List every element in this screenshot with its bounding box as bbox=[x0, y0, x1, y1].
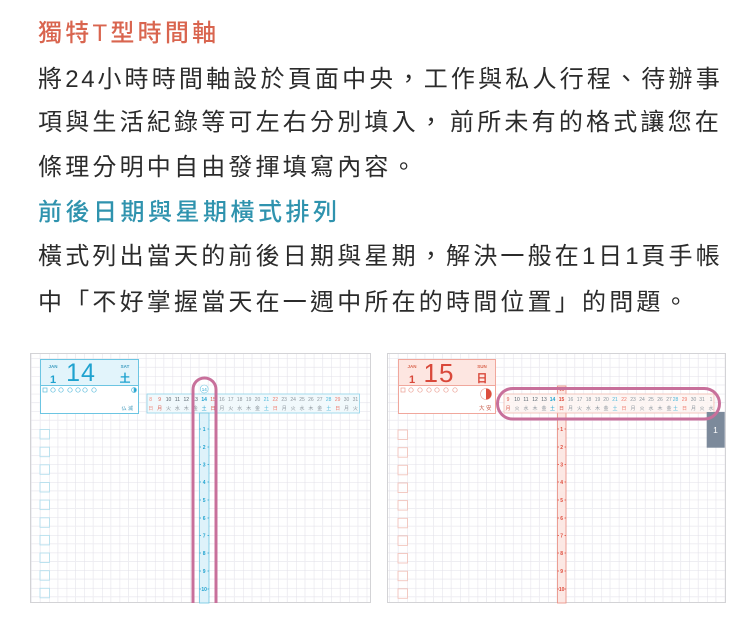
horizontal date strip: 月 bbox=[219, 406, 224, 412]
horizontal date strip: 金 bbox=[255, 405, 260, 412]
grey month tab bbox=[707, 412, 725, 448]
horizontal date strip: 月 bbox=[505, 406, 511, 412]
date header box: JAN bbox=[407, 364, 417, 369]
horizontal date strip: 27 bbox=[666, 397, 672, 403]
horizontal date strip: 日 bbox=[148, 406, 153, 412]
weather icons bbox=[43, 388, 136, 392]
horizontal date strip: 火 bbox=[291, 406, 296, 412]
heading: unique T timeline: 獨特T型時間軸 bbox=[38, 20, 219, 47]
vertical 24-hour timeline: 6 bbox=[560, 516, 563, 522]
horizontal date strip: 日 bbox=[210, 406, 216, 412]
horizontal date strip: 月 bbox=[568, 406, 573, 412]
date header box: JAN bbox=[48, 364, 58, 369]
horizontal date strip: 24 bbox=[290, 397, 296, 403]
horizontal date strip: 29 bbox=[335, 397, 341, 403]
horizontal date strip: 土 bbox=[202, 405, 207, 412]
horizontal date strip: 15 bbox=[559, 397, 564, 403]
pink highlight around vertical timeline bbox=[193, 378, 216, 603]
horizontal date strip: 25 bbox=[648, 397, 654, 403]
horizontal date strip: 木 bbox=[532, 405, 538, 412]
text block: T timeline description bbox=[38, 66, 723, 181]
horizontal date strip: 金 bbox=[666, 405, 672, 412]
vertical 24-hour timeline: 1 bbox=[203, 427, 206, 433]
horizontal date strip: 月 bbox=[691, 406, 696, 412]
vertical 24-hour timeline: 4 bbox=[560, 480, 563, 486]
horizontal date strip: 25 bbox=[299, 397, 305, 403]
horizontal date strip: 18 bbox=[586, 397, 591, 403]
horizontal date strip: 金 bbox=[541, 405, 547, 412]
horizontal date strip: 22 bbox=[273, 397, 278, 403]
horizontal date strip: 火 bbox=[577, 406, 582, 412]
horizontal date strip: 金 bbox=[193, 405, 198, 412]
horizontal date strip: 30 bbox=[344, 397, 349, 403]
horizontal date strip bbox=[147, 394, 360, 413]
horizontal date strip: 23 bbox=[630, 397, 636, 403]
horizontal date strip: 9 bbox=[158, 397, 161, 403]
date header box: 14 bbox=[66, 359, 96, 387]
text block: T timeline description: 將24小時時間軸設於頁面中央，工作與私人行程、待辦事 bbox=[38, 66, 723, 93]
horizontal date strip: 火 bbox=[699, 406, 705, 412]
horizontal date strip: 17 bbox=[577, 397, 582, 403]
horizontal date strip: 21 bbox=[612, 397, 618, 403]
vertical 24-hour timeline: 6 bbox=[203, 516, 206, 522]
horizontal date strip: 10 bbox=[514, 397, 520, 403]
horizontal date strip: 31 bbox=[353, 397, 358, 403]
horizontal date strip: 金 bbox=[317, 405, 322, 412]
vertical 24-hour timeline: 3 bbox=[560, 462, 563, 468]
horizontal date strip: 27 bbox=[317, 397, 323, 403]
date header box: 1 bbox=[409, 374, 415, 386]
vertical 24-hour timeline: 2 bbox=[560, 445, 563, 451]
horizontal date strip: 18 bbox=[237, 397, 243, 403]
weather icons bbox=[401, 388, 457, 392]
horizontal date strip: 20 bbox=[255, 397, 260, 403]
horizontal date strip: 日 bbox=[335, 406, 340, 412]
horizontal date strip: 水 bbox=[237, 405, 242, 412]
horizontal date strip: 水 bbox=[299, 405, 305, 412]
text block: horizontal dates description: 中「不好掌握當天在一週中所在的時間位置」的問題。 bbox=[38, 289, 691, 316]
horizontal date strip: 13 bbox=[541, 397, 547, 403]
horizontal date strip: 水 bbox=[175, 405, 180, 412]
horizontal date strip: 月 bbox=[282, 406, 287, 412]
horizontal date strip: 19 bbox=[595, 397, 600, 403]
horizontal date strip: 火 bbox=[353, 406, 358, 412]
horizontal date strip: 15 bbox=[210, 397, 216, 403]
vertical 24-hour timeline: 10 bbox=[559, 587, 565, 593]
horizontal date strip: 金 bbox=[603, 405, 609, 412]
checkboxes bbox=[40, 430, 50, 598]
horizontal date strip: 木 bbox=[308, 405, 313, 412]
horizontal date strip: 26 bbox=[657, 397, 663, 403]
vertical 24-hour timeline: 7 bbox=[560, 534, 563, 540]
page grid bbox=[388, 354, 726, 602]
pink highlight around date strip bbox=[498, 388, 720, 419]
horizontal date strip: 12 bbox=[532, 397, 538, 403]
vertical 24-hour timeline: 3 bbox=[203, 462, 206, 468]
horizontal date strip: 11 bbox=[175, 397, 180, 403]
panel: red January 15 planner page bbox=[388, 354, 726, 603]
vertical 24-hour timeline: 1 bbox=[560, 427, 563, 433]
date header box: 15 bbox=[424, 358, 454, 388]
horizontal date strip: 8 bbox=[149, 397, 152, 403]
text block: horizontal dates description: 橫式列出當天的前後日期與星期，解決一般在1日1頁手帳 bbox=[38, 243, 723, 270]
horizontal date strip: 12 bbox=[184, 397, 189, 403]
horizontal date strip: 木 bbox=[184, 405, 189, 412]
horizontal date strip: 木 bbox=[246, 405, 251, 412]
horizontal date strip: 木 bbox=[657, 405, 663, 412]
date header box: 日 bbox=[476, 372, 488, 385]
horizontal date strip: 水 bbox=[648, 405, 654, 412]
horizontal date strip: 14 bbox=[201, 397, 207, 403]
horizontal date strip: 21 bbox=[264, 397, 269, 403]
horizontal date strip: 火 bbox=[166, 406, 171, 412]
horizontal date strip: 月 bbox=[344, 406, 349, 412]
text block: T timeline description: 項與生活紀錄等可左右分別填入，前所未有的格式讓您在 bbox=[38, 109, 722, 136]
horizontal date strip: 11 bbox=[523, 397, 529, 403]
date header box bbox=[40, 359, 138, 414]
text block: horizontal dates description bbox=[38, 243, 723, 316]
panel: blue January 14 planner page bbox=[30, 354, 370, 603]
vertical 24-hour timeline: 8 bbox=[203, 551, 206, 557]
horizontal date strip: 水 bbox=[586, 405, 591, 412]
vertical 24-hour timeline: 15 bbox=[559, 387, 565, 392]
rokuyo label: 大安 bbox=[479, 404, 493, 412]
horizontal date strip: 19 bbox=[246, 397, 252, 403]
horizontal date strip: 20 bbox=[603, 397, 609, 403]
horizontal date strip: 水 bbox=[708, 405, 714, 412]
vertical 24-hour timeline: 8 bbox=[560, 551, 563, 557]
horizontal date strip: 9 bbox=[507, 397, 510, 403]
vertical 24-hour timeline bbox=[200, 385, 209, 603]
moon phase icon bbox=[480, 388, 492, 400]
date header box: SAT bbox=[121, 364, 130, 369]
horizontal date strip: 月 bbox=[630, 406, 636, 412]
vertical 24-hour timeline: 10 bbox=[201, 587, 207, 593]
horizontal date strip: 火 bbox=[639, 406, 645, 412]
horizontal date strip: 14 bbox=[550, 397, 555, 403]
vertical 24-hour timeline: 2 bbox=[203, 445, 206, 451]
horizontal date strip: 30 bbox=[691, 397, 696, 403]
date header box: 土 bbox=[120, 371, 130, 385]
heading: horizontal dates and weekdays: 前後日期與星期橫式排列 bbox=[38, 199, 340, 226]
horizontal date strip: 17 bbox=[228, 397, 234, 403]
horizontal date strip: 土 bbox=[612, 405, 618, 412]
horizontal date strip: 土 bbox=[673, 405, 678, 412]
vertical 24-hour timeline: 4 bbox=[203, 480, 206, 486]
horizontal date strip: 16 bbox=[219, 397, 225, 403]
horizontal date strip: 土 bbox=[264, 405, 269, 412]
page grid bbox=[30, 354, 370, 602]
horizontal date strip: 28 bbox=[326, 397, 332, 403]
vertical 24-hour timeline: 14 bbox=[202, 387, 207, 392]
horizontal date strip: 22 bbox=[621, 397, 627, 403]
horizontal date strip: 28 bbox=[673, 397, 678, 403]
grey month tab: 1 bbox=[713, 425, 718, 435]
horizontal date strip: 31 bbox=[699, 397, 705, 403]
vertical 24-hour timeline: 5 bbox=[203, 498, 206, 504]
vertical 24-hour timeline: 9 bbox=[560, 569, 563, 575]
horizontal date strip: 日 bbox=[682, 406, 687, 412]
horizontal date strip: 1 bbox=[710, 397, 713, 403]
horizontal date strip: 24 bbox=[639, 397, 645, 403]
horizontal date strip: 土 bbox=[550, 405, 555, 412]
date header box bbox=[398, 358, 496, 414]
vertical 24-hour timeline bbox=[558, 386, 566, 603]
text block: T timeline description: 條理分明中自由發揮填寫內容。 bbox=[38, 154, 419, 181]
horizontal date strip: 土 bbox=[326, 405, 331, 412]
horizontal date strip: 10 bbox=[166, 397, 171, 403]
horizontal date strip: 16 bbox=[568, 397, 573, 403]
horizontal date strip bbox=[504, 394, 714, 413]
horizontal date strip: 日 bbox=[273, 406, 278, 412]
vertical 24-hour timeline: 7 bbox=[203, 534, 206, 540]
horizontal date strip: 木 bbox=[595, 405, 600, 412]
horizontal date strip: 23 bbox=[281, 397, 287, 403]
horizontal date strip: 火 bbox=[514, 406, 520, 412]
horizontal date strip: 日 bbox=[621, 406, 627, 412]
horizontal date strip: 日 bbox=[559, 406, 564, 412]
horizontal date strip: 火 bbox=[228, 406, 233, 412]
checkboxes bbox=[398, 430, 408, 598]
date header box: SUN bbox=[477, 364, 487, 369]
horizontal date strip: 29 bbox=[682, 397, 687, 403]
rokuyo label: 仏滅 bbox=[121, 405, 135, 412]
horizontal date strip: 26 bbox=[308, 397, 314, 403]
horizontal date strip: 水 bbox=[523, 405, 529, 412]
horizontal date strip: 月 bbox=[157, 406, 162, 412]
vertical 24-hour timeline: 9 bbox=[203, 569, 206, 575]
horizontal date strip: 13 bbox=[192, 397, 198, 403]
date header box: 1 bbox=[50, 374, 56, 386]
vertical 24-hour timeline: 5 bbox=[560, 498, 563, 504]
